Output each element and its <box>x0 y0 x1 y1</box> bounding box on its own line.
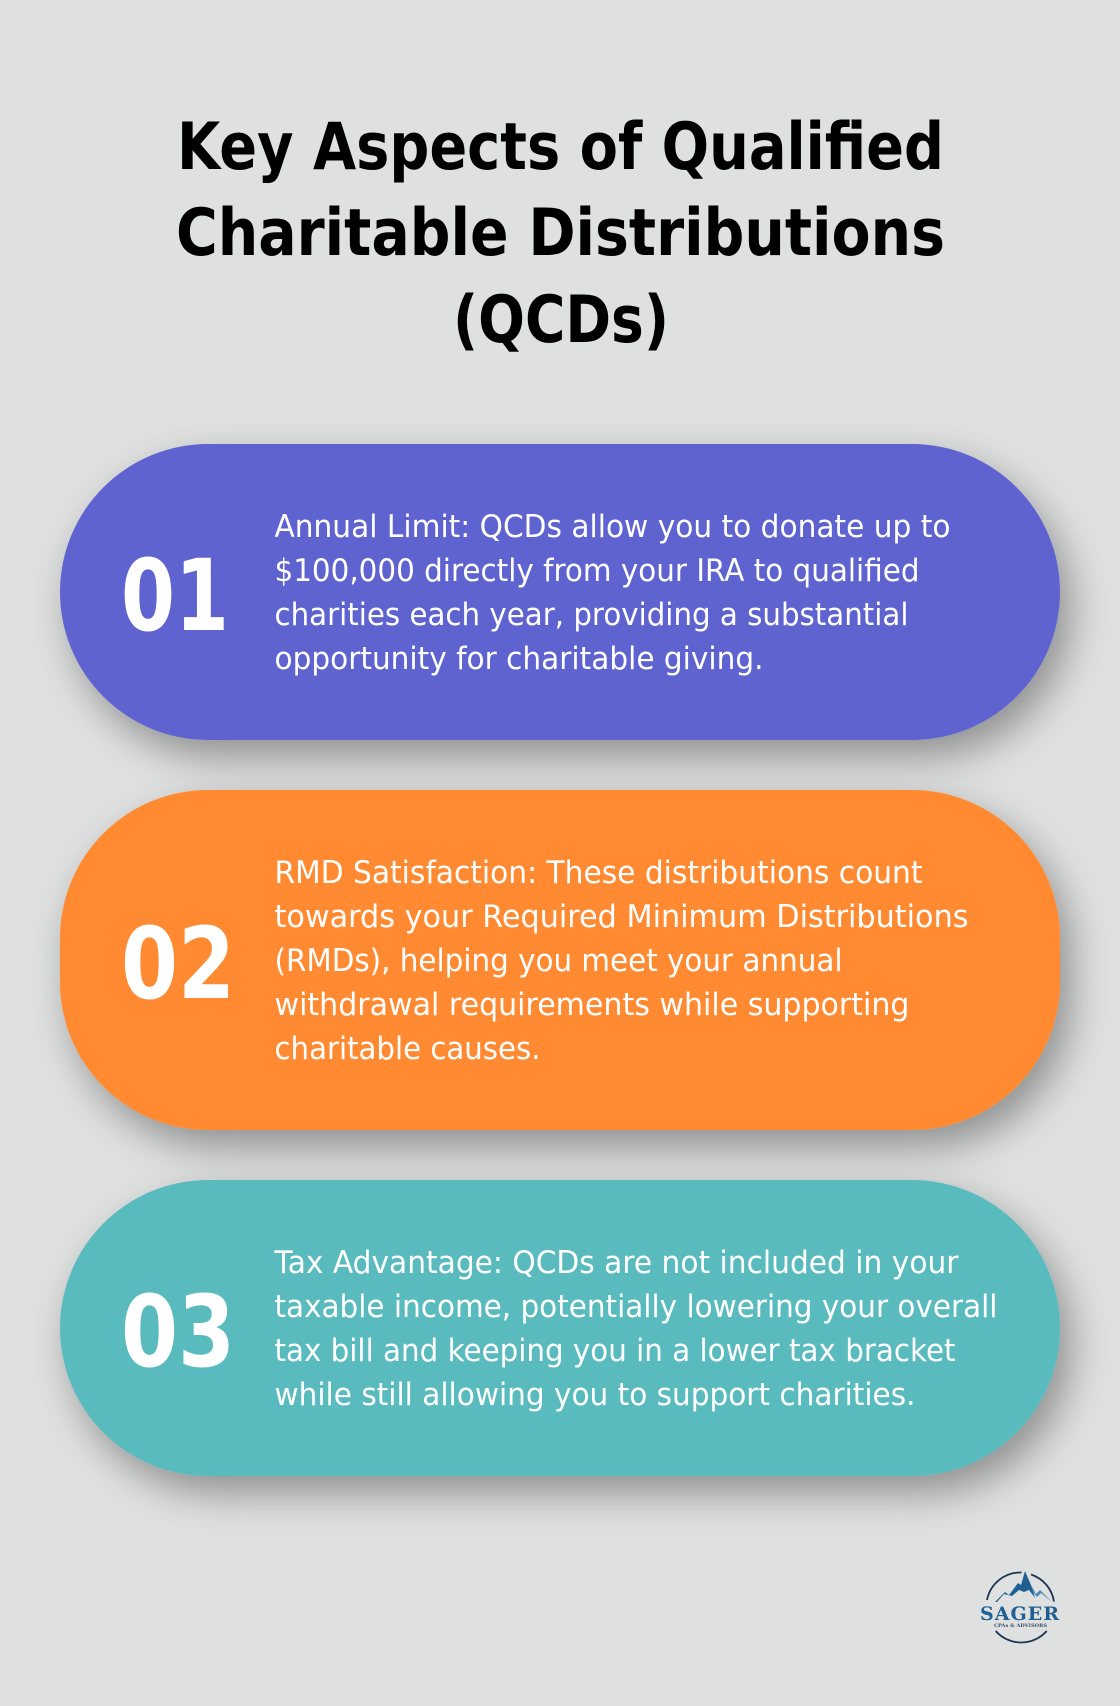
pill background purple <box>60 444 1060 740</box>
icon: Sager logo <box>980 1571 1059 1643</box>
title <box>176 110 945 358</box>
title: Charitable Distributions <box>176 196 945 271</box>
text: tax advantage: while still allowing you to support charities. <box>274 1377 916 1413</box>
number 01: 01 <box>121 539 229 654</box>
title: Key Aspects of Qualified <box>177 110 944 185</box>
icon: Sager logo: SAGER <box>980 1603 1059 1625</box>
pill background teal <box>60 1180 1060 1476</box>
number 02: 02 <box>121 907 235 1022</box>
text: annual limit: Annual Limit: QCDs allow you to donate up to <box>274 509 950 545</box>
text: annual limit <box>274 509 950 677</box>
panel: RMD satisfaction <box>60 790 1060 1130</box>
text: annual limit: opportunity for charitable giving. <box>274 641 764 677</box>
text: RMD satisfaction <box>274 855 968 1067</box>
text: tax advantage: tax bill and keeping you in a lower tax bracket <box>274 1333 956 1369</box>
text: RMD satisfaction: RMD Satisfaction: These distributions count <box>274 855 922 891</box>
text: annual limit: charities each year, providing a substantial <box>274 597 908 633</box>
title: (QCDs) <box>453 283 669 358</box>
icon: Sager logo: CPAs & ADVISORS <box>994 1623 1047 1629</box>
text: annual limit: $100,000 directly from your IRA to qualified <box>274 553 920 589</box>
text: tax advantage <box>274 1245 997 1413</box>
text: tax advantage: Tax Advantage: QCDs are not included in your <box>274 1245 959 1281</box>
text: RMD satisfaction: charitable causes. <box>274 1031 540 1067</box>
text: RMD satisfaction: (RMDs), helping you meet your annual <box>274 943 842 979</box>
text: RMD satisfaction: towards your Required Minimum Distributions <box>274 899 968 935</box>
number 03: 03 <box>121 1275 235 1390</box>
panel: tax advantage <box>60 1180 1060 1476</box>
text: RMD satisfaction: withdrawal requirements while supporting <box>274 987 910 1023</box>
pill background orange <box>60 790 1060 1130</box>
panel: annual limit <box>60 444 1060 740</box>
text: tax advantage: taxable income, potentially lowering your overall <box>274 1289 998 1325</box>
